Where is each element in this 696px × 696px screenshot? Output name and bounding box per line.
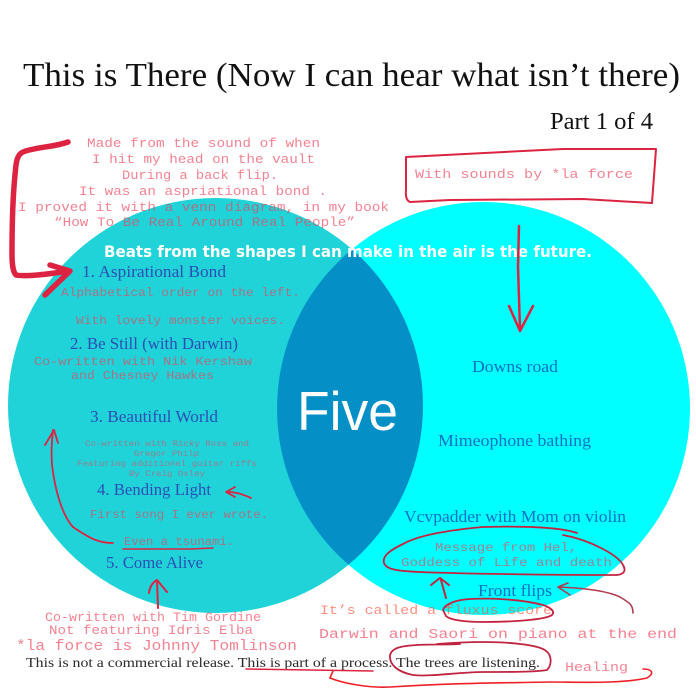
note: origin story: It was an aspriational bond . — [79, 184, 327, 199]
title: This is There (Now I can hear what isn’t there) — [23, 57, 680, 94]
track 3 notes: Gregor Philp — [134, 449, 199, 459]
note: piano ending: Darwin and Saori on piano at the end — [319, 628, 677, 643]
track: Vcvpadder: Vcvpadder with Mom on violin — [404, 507, 626, 526]
arrow: origin note to track 1 — [12, 142, 70, 295]
track 1 notes — [61, 286, 300, 328]
track: Front flips: Front flips — [478, 581, 552, 600]
note: origin story: I proved it with a venn diagram, in my book — [18, 200, 389, 215]
track note: message: Goddess of Life and death — [401, 556, 612, 570]
note: credits: Not featuring Idris Elba — [49, 624, 254, 638]
right circle — [277, 202, 690, 615]
track 2: 2. Be Still (with Darwin) — [70, 334, 238, 353]
note: credits: *la force is Johnny Tomlinson — [16, 639, 297, 655]
note: origin story: During a back flip. — [122, 168, 278, 183]
circle: fluxus score — [443, 599, 553, 622]
arrow: down to right tracks — [509, 226, 533, 331]
track: Downs road: Downs road — [472, 357, 559, 376]
track 4 notes — [90, 508, 268, 549]
track 3 notes — [77, 439, 257, 479]
note: origin story — [18, 136, 389, 230]
note: origin story: Made from the sound of when — [87, 136, 320, 151]
track note: message: Message from Hel, — [435, 541, 577, 555]
overlap lens — [277, 250, 423, 565]
note: credits: Co-written with Tim Gordine — [45, 611, 261, 625]
track 1: 1. Aspirational Bond — [82, 262, 227, 281]
arrow: fluxus to message — [431, 578, 449, 598]
underline: tsunami — [123, 548, 213, 549]
track 2 notes: and Chesney Hawkes — [71, 369, 214, 383]
note: fluxus score: It’s called a fluxus score — [320, 603, 552, 618]
track 3 notes: By Craig Oxley — [129, 469, 205, 479]
arrow: tsunami to beautiful world — [45, 430, 113, 543]
track 1 notes: With lovely monster voices. — [76, 314, 285, 328]
venn heading: Beats from the shapes I can make in the air is the future. — [104, 242, 592, 261]
track 1 notes: Alphabetical order on the left. — [61, 286, 300, 300]
note: origin story: I hit my head on the vault — [92, 152, 315, 167]
arrow: up to come alive — [149, 580, 167, 608]
track note: message — [401, 541, 612, 570]
arrow: to front flips — [558, 583, 633, 613]
track 2 notes — [34, 355, 253, 383]
note: with sounds by: With sounds by *la force — [415, 167, 633, 182]
track 3: 3. Beautiful World — [90, 407, 219, 426]
box around with sounds note — [406, 149, 656, 203]
arrow: healing swoosh — [330, 669, 652, 687]
venn diagram — [8, 198, 690, 615]
centre label: Five: Five — [297, 380, 398, 442]
track 4: 4. Bending Light — [97, 480, 211, 499]
note: healing: Healing — [565, 660, 628, 675]
underline: part of a process — [246, 669, 373, 671]
track 5: 5. Come Alive — [106, 553, 203, 572]
arrow: to bending light — [226, 487, 251, 498]
part label: Part 1 of 4 — [550, 109, 653, 135]
track: Mimeophone bathing: Mimeophone bathing — [438, 431, 591, 450]
left track list — [34, 262, 300, 572]
circle: the trees are listening — [390, 642, 551, 675]
track 4 notes: Even a tsunami. — [124, 535, 234, 549]
left circle — [8, 198, 423, 613]
footer statement: This is not a commercial release. This is part of a process. The trees are listening. — [26, 656, 540, 671]
track 4 notes: First song I ever wrote. — [90, 508, 268, 522]
right track list — [401, 357, 626, 600]
note: credits — [16, 611, 297, 655]
circle: message from Hel — [384, 527, 625, 575]
track 2 notes: Co-written with Nik Kershaw — [34, 355, 253, 369]
track 3 notes: Featuring additional guitar riffs — [77, 459, 257, 469]
track 3 notes: Co-written with Ricky Ross and — [85, 439, 249, 449]
note: origin story: “How To Be Real Around Real People” — [54, 215, 355, 230]
